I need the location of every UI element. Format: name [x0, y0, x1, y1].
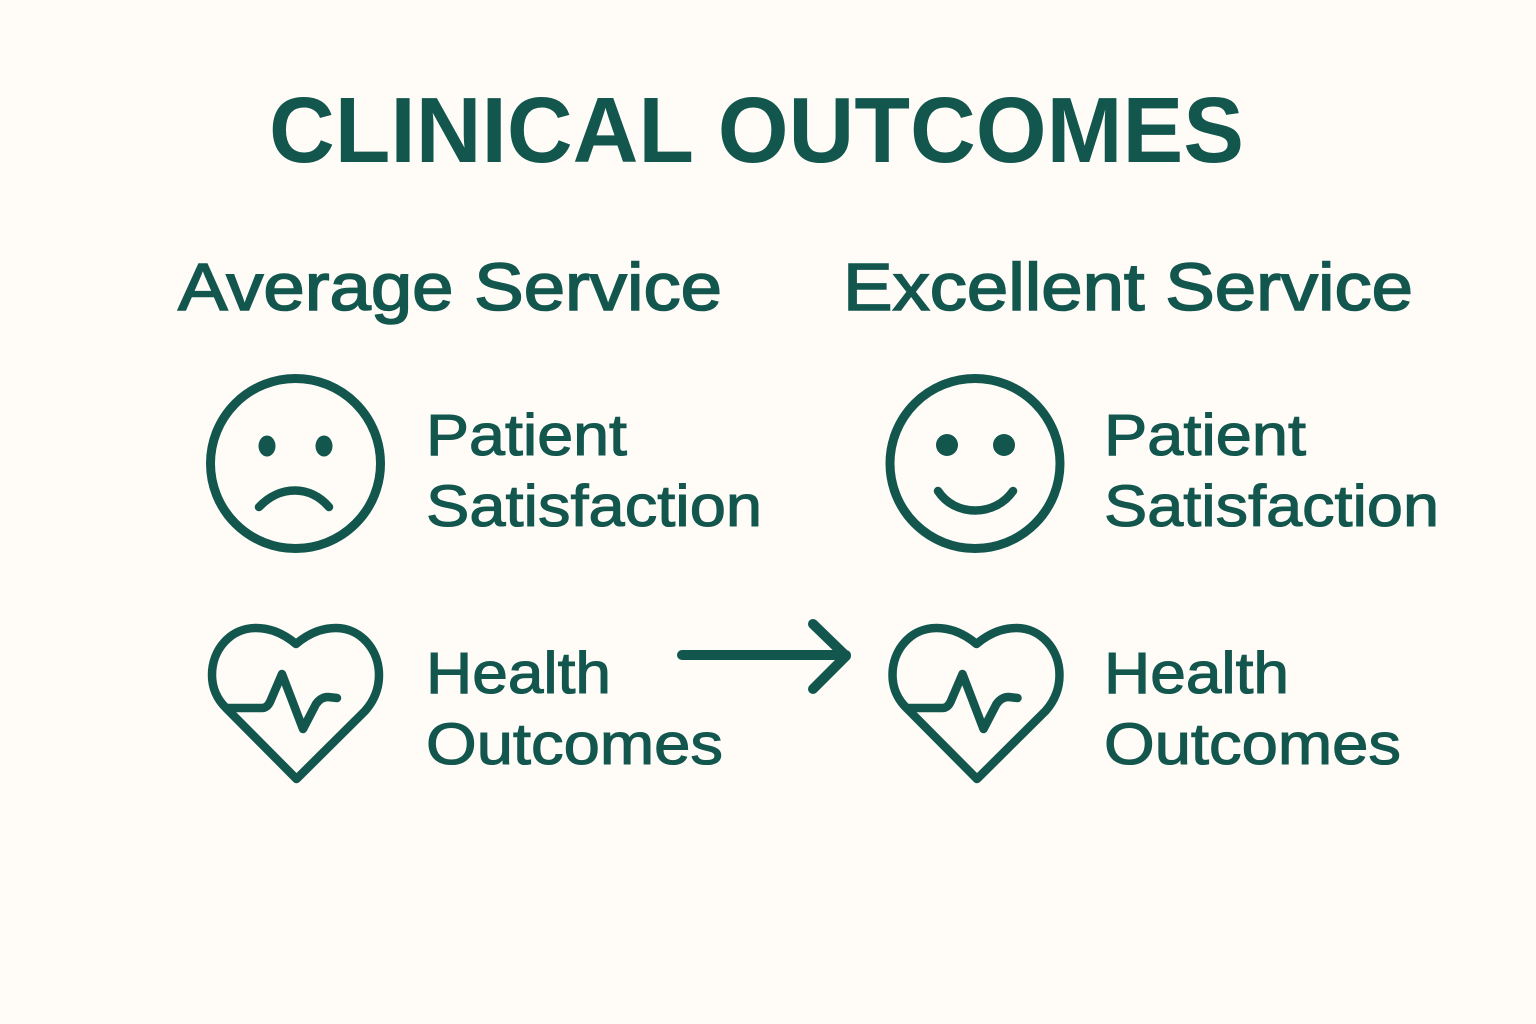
label: health outcomes: Health — [426, 641, 611, 706]
label: patient satisfaction: Satisfaction — [1104, 474, 1439, 539]
label: health outcomes: Outcomes — [1104, 712, 1401, 777]
icon: sad face — [210, 378, 380, 548]
icon: happy face — [890, 378, 1060, 548]
icon: heart with pulse — [892, 628, 1060, 779]
label: patient satisfaction: Patient — [426, 403, 627, 468]
panel: excellent service — [843, 250, 1439, 779]
label: health outcomes — [1104, 641, 1401, 777]
arrow — [682, 624, 846, 689]
icon: heart with pulse — [212, 628, 379, 779]
label: health outcomes: Outcomes — [426, 712, 723, 777]
label: patient satisfaction — [426, 403, 762, 539]
heading: excellent service: Excellent Service — [843, 250, 1413, 325]
panel: average service — [178, 250, 762, 779]
label: patient satisfaction: Patient — [1104, 403, 1306, 468]
title: CLINICAL OUTCOMES — [269, 78, 1244, 182]
label: patient satisfaction — [1104, 403, 1439, 539]
heading: average service: Average Service — [178, 250, 722, 325]
label: patient satisfaction: Satisfaction — [426, 474, 762, 539]
label: health outcomes: Health — [1104, 641, 1289, 706]
label: health outcomes — [426, 641, 723, 777]
